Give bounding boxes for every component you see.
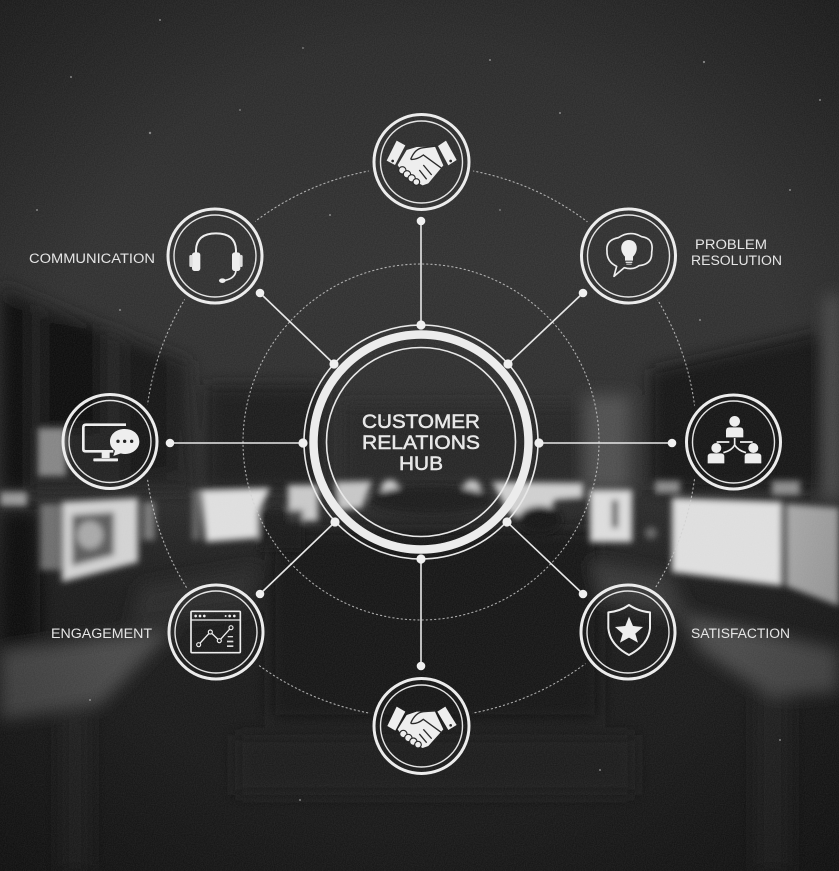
- hub title: CUSTOMER: [362, 411, 480, 433]
- node: monitor chat: [63, 394, 157, 488]
- icon: shield with star: [608, 605, 650, 655]
- label: satisfaction: SATISFACTION: [691, 626, 790, 641]
- label: engagement: ENGAGEMENT: [51, 626, 152, 641]
- node: bottom handshake: [374, 678, 469, 774]
- node: problem resolution: [582, 209, 676, 303]
- node: satisfaction shield: [581, 585, 675, 679]
- icon: org chart people: [708, 416, 761, 463]
- icon: browser window with line chart: [191, 611, 240, 653]
- label: problem resolution: [691, 237, 782, 268]
- node: communication headset: [168, 209, 262, 303]
- label: problem resolution: PROBLEM: [695, 237, 767, 252]
- icon: handshake: [387, 707, 457, 748]
- icon: monitor with speech bubble: [83, 425, 139, 461]
- icon: handshake: [387, 141, 457, 185]
- node: hierarchy team: [686, 395, 780, 489]
- hub title: [362, 411, 480, 475]
- icon: thought bubble with light bulb: [607, 234, 652, 276]
- node: top handshake: [374, 114, 469, 210]
- label: problem resolution: RESOLUTION: [691, 253, 782, 268]
- node: engagement chart: [169, 585, 263, 679]
- connector lines: [166, 217, 676, 670]
- dotted orbit rings: [145, 166, 697, 718]
- central hub: [298, 320, 544, 564]
- label: communication: COMMUNICATION: [29, 251, 155, 266]
- hub title: HUB: [399, 453, 443, 475]
- hub title: RELATIONS: [362, 432, 480, 454]
- icon: headset: [189, 233, 243, 283]
